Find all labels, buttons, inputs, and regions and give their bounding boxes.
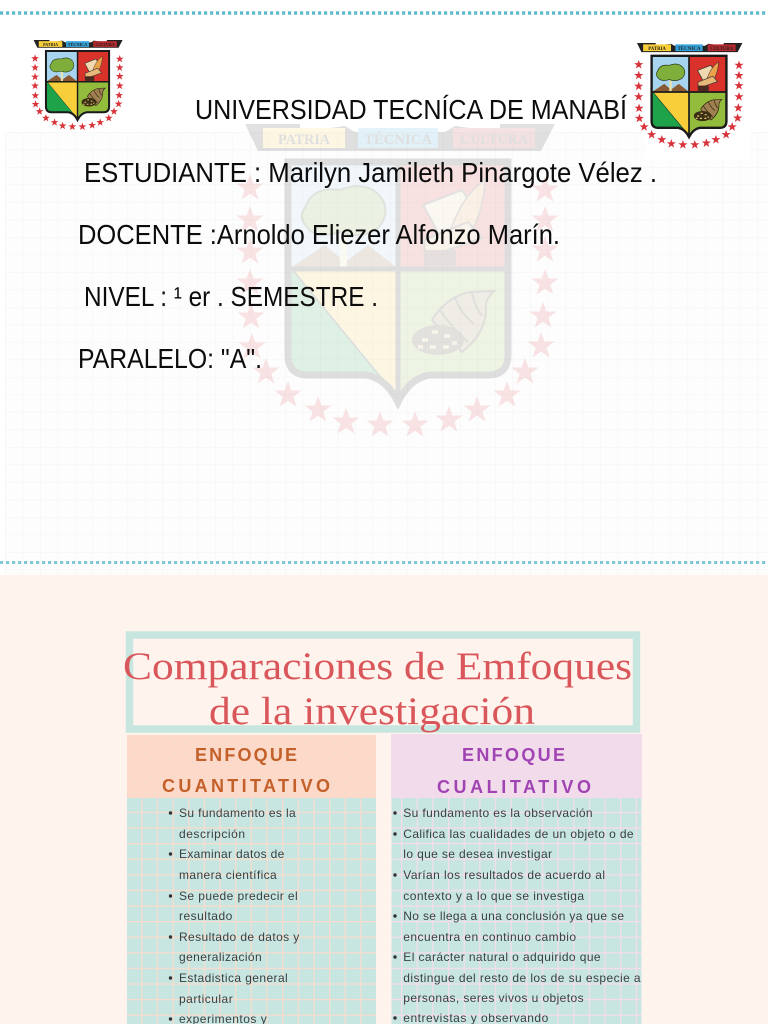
column header: cuantitativo: ENFOQUE [195,745,297,765]
list: cuantitativo: Se puede predecir el [179,889,298,903]
list: cuantitativo: manera científica [179,868,277,882]
lower dotted border [0,561,768,564]
icon: left crest logo: TÉCNICA [68,42,88,47]
grid background: cualitativo [392,798,642,1024]
column header: cualitativo: CUALITATIVO [437,777,591,797]
title [123,645,632,733]
watermark crest: PATRIA [278,132,330,148]
list: cualitativo: encuentra en continuo cambio [403,930,576,944]
title frame [130,635,636,729]
top section background [0,0,768,575]
title: Comparaciones de Emfoques [123,645,632,688]
column header: cualitativo [391,734,642,798]
text: level: NIVEL : ¹ er . SEMESTRE . [84,281,378,312]
list: cuantitativo: Examinar datos de [179,847,285,861]
column header: cualitativo: ENFOQUE [462,745,565,765]
list: cuantitativo: particular [179,992,233,1006]
list: cualitativo [393,806,641,1024]
panel: enfoque cuantitativo [127,735,376,1024]
icon: left crest logo: PATRIA [43,42,59,47]
title: de la investigación [209,690,535,733]
column header: cuantitativo: CUANTITATIVO [162,776,330,796]
list: cualitativo: lo que se desea investigar [403,847,552,861]
list: cualitativo: No se llega a una conclusión ya que se [403,909,624,923]
watermark crest [236,124,558,436]
heading: university: UNIVERSIDAD TECNÍCA DE MANABÍ [195,94,627,125]
list: cualitativo: contexto y a lo que se investiga [403,889,584,903]
lower section background [0,575,768,1024]
list: cualitativo: distingue del resto de los de su especie a [403,971,641,985]
top dotted border [0,11,768,15]
grid background: cuantitativo [127,798,376,1024]
watermark crest: CULTURA [460,132,528,148]
list: cuantitativo: Estadistica general [179,971,288,985]
icon: right crest logo [634,43,744,149]
text: student: ESTUDIANTE : Marilyn Jamileth Pinargote Vélez . [84,157,657,188]
list: cuantitativo: Resultado de datos y [179,930,299,944]
list: cualitativo: Califica las cualidades de un objeto o de [403,827,634,841]
list: cualitativo: personas, seres vivos u objetos [403,991,584,1005]
list: cualitativo: Su fundamento es la observación [403,806,593,820]
list: cuantitativo: generalización [179,950,262,964]
icon: right crest logo: CULTURA [710,46,734,52]
text: section: PARALELO: "A". [78,343,262,374]
icon: right crest logo: PATRIA [648,46,666,52]
list: cualitativo: Varían los resultados de acuerdo al [403,868,605,882]
icon: right crest logo: TÉCNICA [677,44,701,52]
list: cuantitativo: resultado [179,909,233,923]
list: cualitativo: El carácter natural o adquirido que [403,950,601,964]
watermark crest: TÉCNICA [364,131,432,148]
list: cuantitativo: descripción [179,827,245,841]
text: teacher: DOCENTE :Arnoldo Eliezer Alfonzo Marín. [78,219,560,250]
list: cuantitativo [169,806,299,1024]
panel: enfoque cualitativo [391,734,642,1024]
icon: left crest logo: CULTURA [95,42,116,47]
column header: cuantitativo [127,735,376,798]
list: cuantitativo: Su fundamento es la [179,806,296,820]
icon: left crest logo [31,40,124,130]
